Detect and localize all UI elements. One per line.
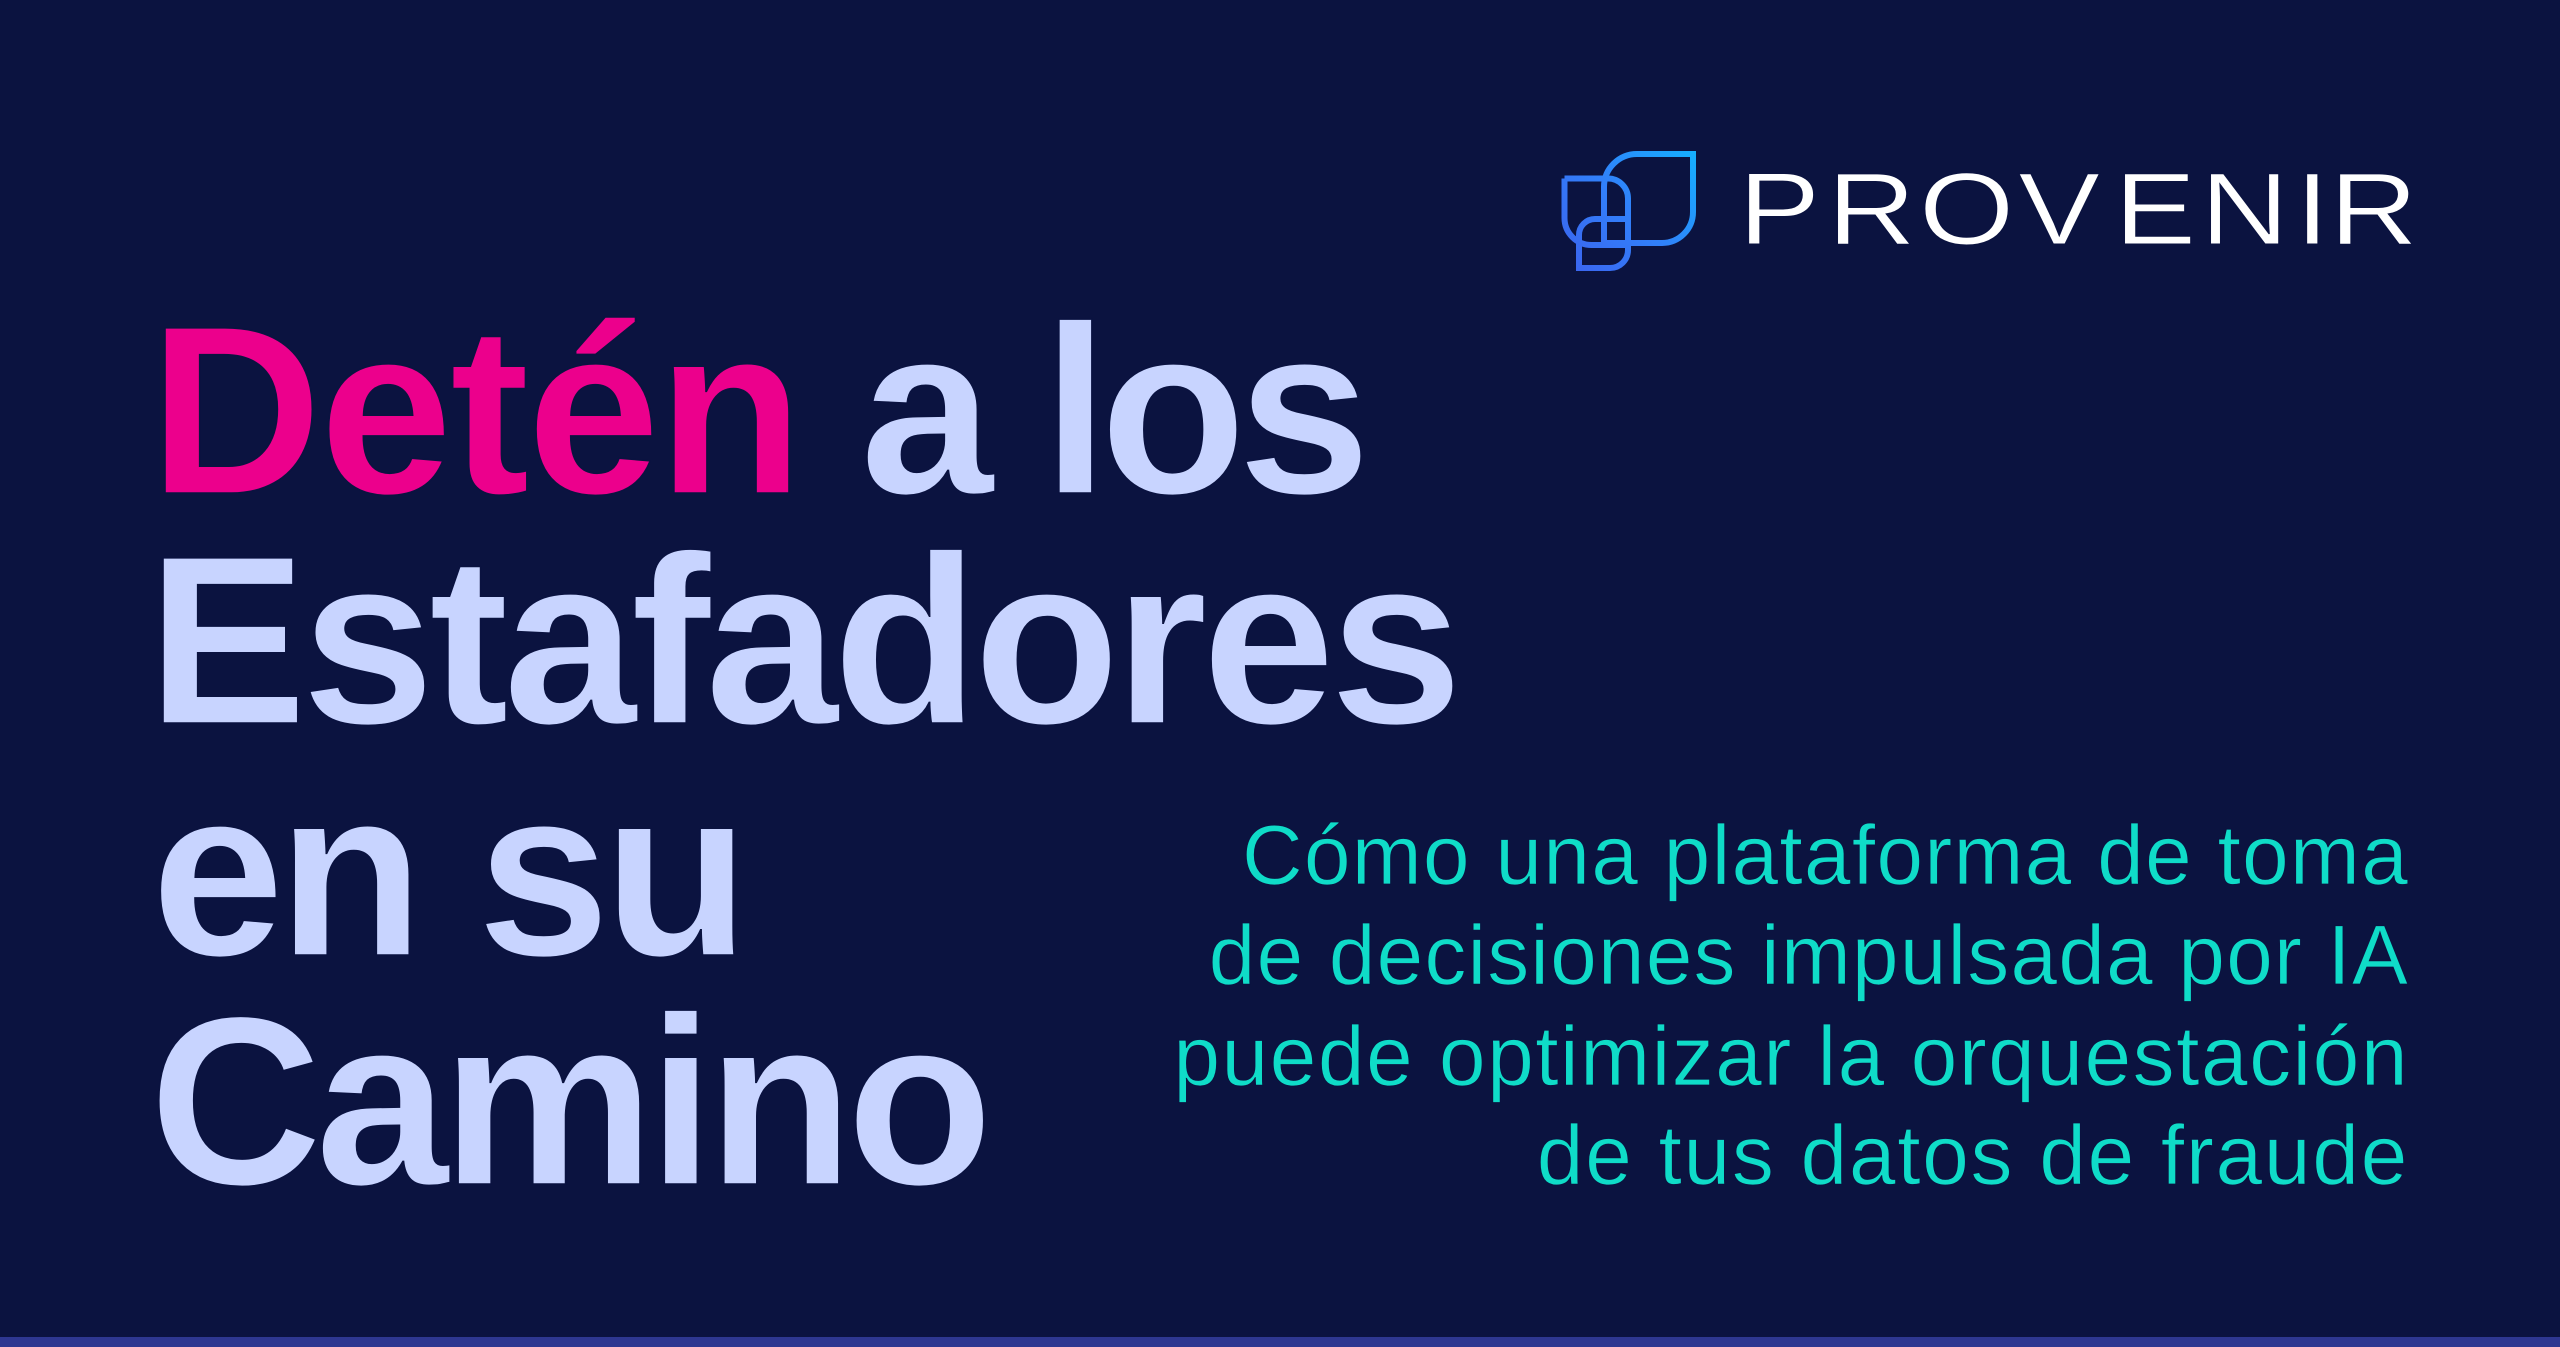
subtitle line 4: de tus datos de fraude [1537, 1108, 2409, 1202]
icon: overlapping squares [1564, 154, 1693, 268]
subtitle [1173, 808, 2409, 1202]
title line 3: en su [151, 738, 743, 1006]
subtitle line 1: Cómo una plataforma de toma [1242, 808, 2409, 902]
title word: Detén: Detén [149, 276, 801, 544]
wordmark: PROVENIR [1738, 152, 2418, 266]
title line 4: Camino [149, 967, 986, 1235]
title [147, 276, 1457, 1235]
subtitle line 2: de decisiones impulsada por IA [1209, 908, 2409, 1002]
subtitle line 3: puede optimizar la orquestación [1173, 1009, 2409, 1103]
title words: a los: a los [860, 276, 1362, 544]
title line 2: Estafadores [147, 506, 1457, 774]
logo: Provenir [1564, 152, 2418, 268]
bottom accent bar [0, 1337, 2560, 1347]
